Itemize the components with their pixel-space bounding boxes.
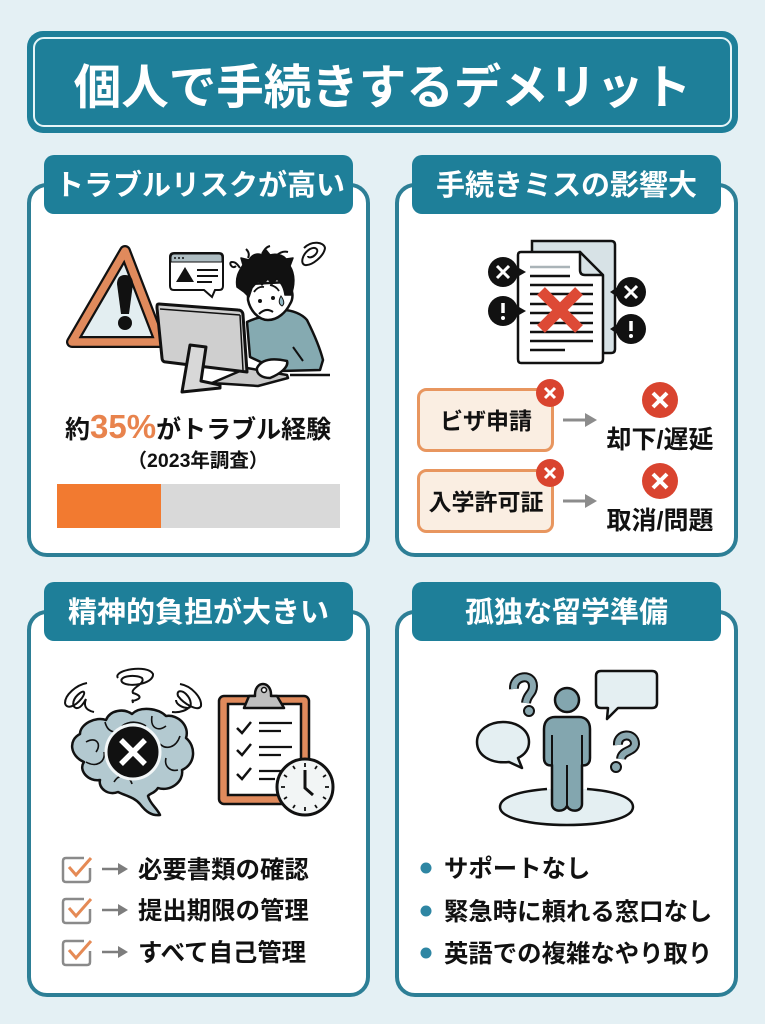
panel: isolated preparation [397,582,736,995]
icon: worried person [212,243,330,386]
bullet item 3: 英語での複雑なやり取り [444,941,712,968]
icon: warning triangle [72,251,160,342]
stat text: 約35%がトラブル経験 [65,408,331,445]
heading: isolated preparation: 孤独な留学準備 [465,596,668,629]
title banner: 個人で手続きするデメリット [74,62,691,115]
title banner [27,31,738,133]
bullet item 2: 緊急時に頼れる窓口なし [444,899,712,926]
flow: visa application: ビザ申請 [440,408,532,434]
heading: trouble risk: トラブルリスクが高い [55,168,345,202]
checklist item 1: 必要書類の確認 [138,857,309,884]
progress bar 35% [57,484,340,528]
icon: lone person with questions [477,671,657,825]
checklist item 1 [63,857,309,884]
heading: trouble risk [44,155,353,214]
panel: procedure mistakes [397,155,736,555]
stat source: （2023年調査） [128,449,268,472]
checklist item 2: 提出期限の管理 [138,898,309,925]
checklist item 3 [63,940,306,967]
flow: admission permit: 取消/問題 [607,507,713,535]
panel: mental burden [29,582,368,995]
heading: isolated preparation [412,582,721,641]
flow: admission permit [418,459,713,535]
flow: admission permit: 入学許可証 [428,489,544,515]
icon: monitor [157,304,247,392]
flow: visa application: 却下/遅延 [607,426,713,454]
heading: mental burden: 精神的負担が大きい [68,595,329,629]
checklist item 2 [63,898,309,925]
heading: procedure mistakes: 手続きミスの影響大 [436,169,697,202]
icon: overloaded brain [65,669,201,815]
flow: visa application [418,379,713,454]
icon: rejected document [488,241,646,363]
heading: mental burden [44,582,353,641]
bullet item 1: サポートなし [444,856,590,883]
icon: error popup [170,253,223,297]
heading: procedure mistakes [412,155,721,214]
panel: trouble risk [29,155,368,555]
icon: clipboard and clock [219,684,333,815]
checklist item 3: すべて自己管理 [138,940,306,967]
